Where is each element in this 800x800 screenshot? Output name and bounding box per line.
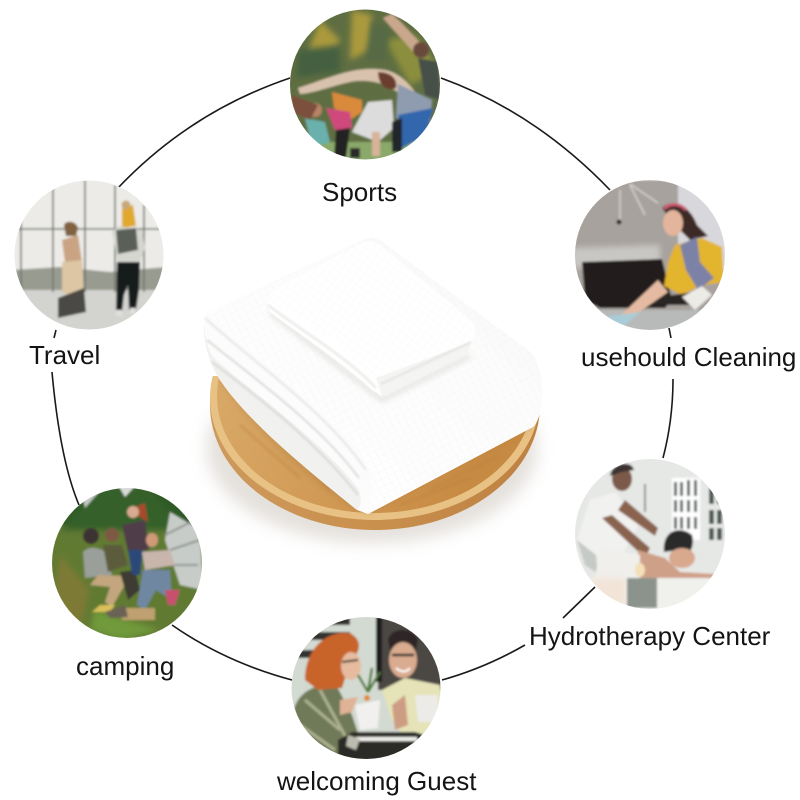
food carton and plant	[338, 668, 440, 762]
photo: camping	[50, 484, 205, 640]
photo: household cleaning	[572, 180, 728, 332]
airport window background	[12, 178, 166, 332]
bath tub and candle	[591, 562, 712, 609]
label: Sports: Sports	[322, 177, 397, 207]
small towel shadow	[270, 312, 470, 400]
man with backpack and child	[112, 200, 145, 316]
label: camping: camping	[76, 651, 174, 681]
photo: travel	[12, 178, 166, 332]
photo: sports	[288, 7, 443, 166]
man with glasses	[382, 630, 440, 736]
woman with suitcase	[58, 222, 86, 318]
park background	[288, 7, 443, 166]
field background	[50, 484, 205, 640]
label: household cleaning: usehould Cleaning	[581, 342, 796, 372]
seated campers	[83, 503, 180, 620]
therapist	[577, 464, 658, 574]
product: folded towels on wooden plate	[204, 238, 542, 543]
label: welcoming guest: welcoming Guest	[276, 766, 477, 796]
client	[595, 530, 720, 582]
connecting ring arcs	[52, 78, 673, 680]
spa room background	[575, 459, 725, 579]
room background	[572, 180, 728, 332]
stretching people	[292, 14, 440, 158]
woman with red hair	[293, 633, 362, 760]
photo: welcoming guest	[292, 617, 440, 759]
black sofa	[582, 259, 672, 308]
small folded towel	[268, 241, 475, 396]
plate shadow	[207, 353, 537, 543]
label: travel: Travel	[29, 340, 100, 370]
label: hydrotherapy center: Hydrotherapy Center	[529, 621, 771, 651]
photo: hydrotherapy center	[572, 456, 728, 612]
wooden plate	[210, 376, 540, 530]
woman cleaning	[606, 203, 724, 325]
large folded towel	[204, 238, 542, 514]
cafe background	[292, 617, 440, 734]
